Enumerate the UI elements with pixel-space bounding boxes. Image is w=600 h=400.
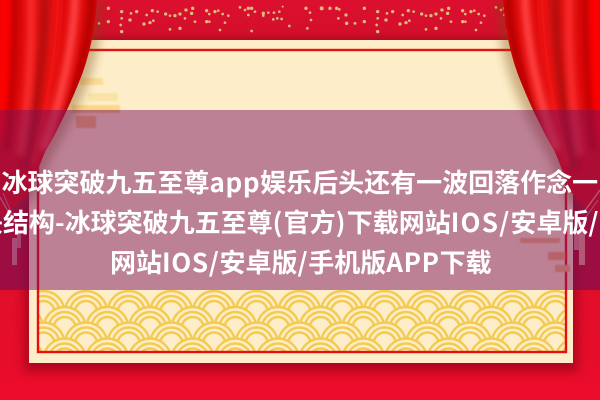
left tassel — [0, 193, 21, 265]
right curtain — [496, 0, 600, 225]
background: darker side strips behind the band — [0, 200, 600, 290]
left curtain — [0, 0, 104, 225]
confetti: gold sparkles across header band — [98, 6, 547, 33]
overlay band — [0, 110, 600, 290]
scallop wave pattern — [39, 290, 565, 351]
caption line 3: 网站IOS/安卓版/手机版APP下载 — [110, 243, 492, 280]
decoration: faint cloud motif left — [72, 78, 120, 128]
caption line 1: 冰球突破九五至尊app娱乐后头还有一波回落作念一 — [2, 163, 598, 200]
decoration: faint cloud motif right — [520, 238, 570, 272]
right tassel — [574, 190, 600, 265]
